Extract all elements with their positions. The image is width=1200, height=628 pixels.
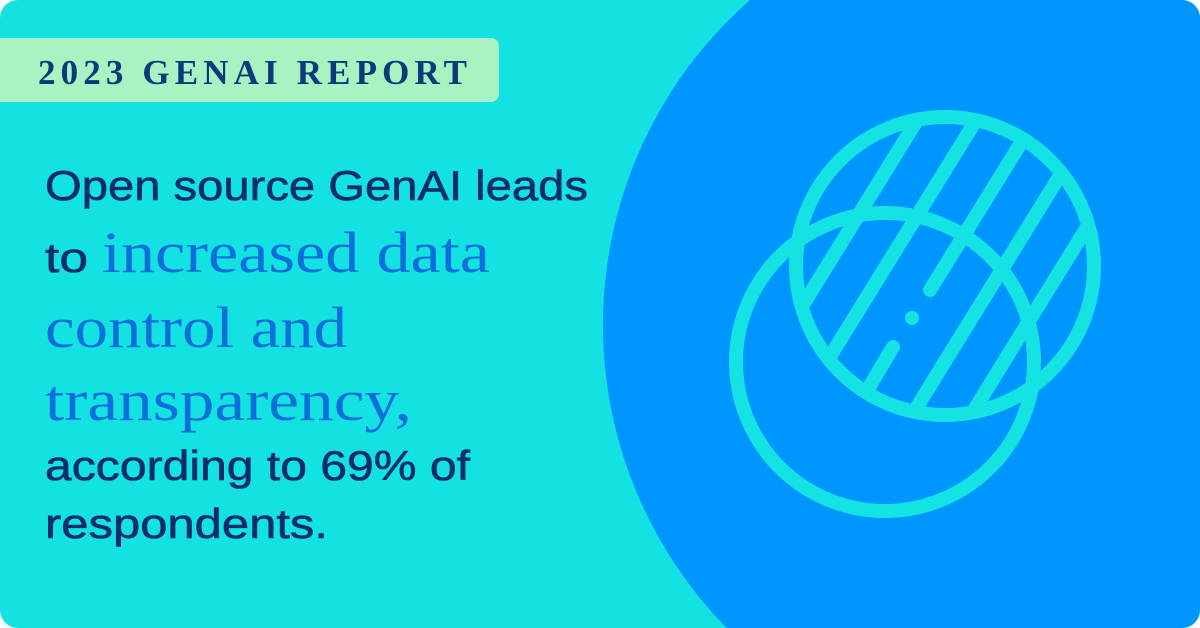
headline text: increased data <box>102 220 490 285</box>
headline text: Open source GenAI leads <box>45 162 588 209</box>
blue circle panel <box>603 0 1200 628</box>
headline text: according to 69% of <box>45 442 470 489</box>
headline text: to <box>45 234 88 281</box>
icon: overlapping circles with hatching <box>729 110 1101 518</box>
headline text: control and <box>45 295 347 360</box>
badge: 2023 GenAI report <box>0 38 499 102</box>
headline text: transparency, <box>45 368 412 433</box>
headline text: respondents. <box>45 500 328 547</box>
badge: 2023 GenAI report: 2023 GENAI REPORT <box>38 53 472 92</box>
headline text <box>45 162 588 547</box>
